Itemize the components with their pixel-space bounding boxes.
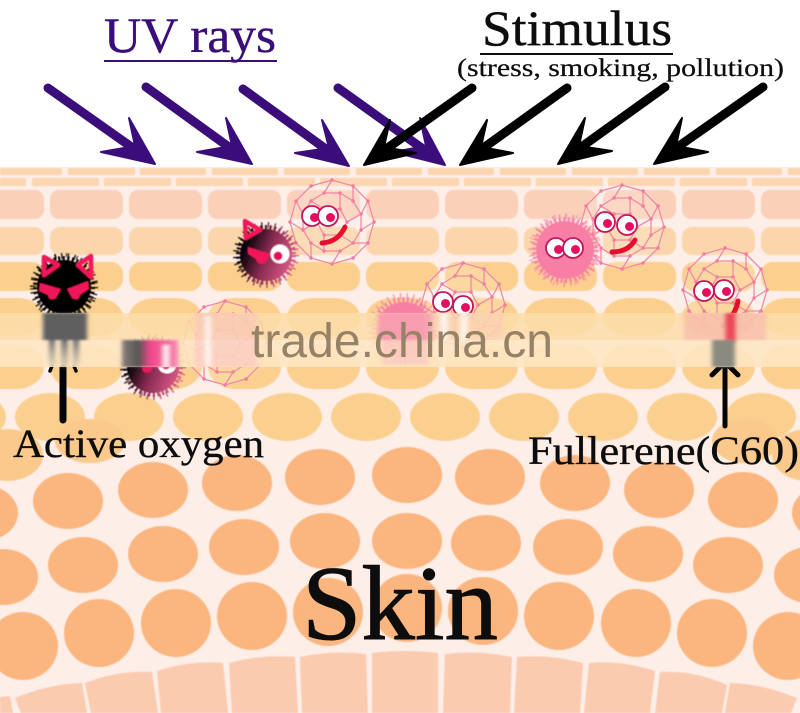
- brick row 3: [0, 190, 800, 219]
- fullerene character top left: [290, 180, 374, 264]
- watermark band: [0, 313, 800, 367]
- label pointer: active oxygen barbs: [50, 366, 76, 371]
- heading: UV rays: UV rays: [104, 7, 276, 63]
- subheading: stimulus sources: (stress, smoking, pollution): [457, 55, 784, 82]
- label: Active oxygen: Active oxygen: [13, 421, 264, 466]
- brick row 4: [0, 227, 800, 255]
- heading: Stimulus: Stimulus: [482, 0, 672, 56]
- round orange cells: [0, 447, 800, 680]
- skin cell layers: [0, 168, 800, 713]
- UV arrow 4: [338, 88, 445, 165]
- thin surface bricks: [0, 168, 800, 186]
- fullerene character top right: [580, 185, 664, 269]
- half-neutralised oxygen character top: [236, 221, 296, 285]
- pink neutralised oxygen character: [530, 215, 600, 285]
- UV arrow 1: [48, 88, 155, 164]
- stimulus arrow 3: [558, 87, 665, 164]
- characters layer: [32, 180, 767, 397]
- half-neutralised oxygen character lower: [123, 337, 183, 397]
- stimulus arrow 4: [654, 87, 763, 164]
- yellow-orange transition cells: [0, 419, 800, 481]
- label pointer: fullerene: [712, 362, 738, 426]
- watermark text: trade.china.cn: [251, 315, 553, 368]
- label pointer: active oxygen: [60, 368, 66, 420]
- UV arrow 2: [146, 87, 252, 164]
- stimulus arrow 1: [364, 88, 472, 165]
- stimulus arrows: [364, 87, 763, 165]
- label: Fullerene (C60): Fullerene(C60): [528, 428, 799, 473]
- UV arrow 3: [243, 89, 349, 166]
- oval cell row: [0, 393, 796, 441]
- UV ray arrows: [48, 87, 445, 166]
- skin background: [0, 167, 800, 713]
- fullerene character far right: [683, 248, 767, 332]
- bottom columnar cells: [0, 651, 797, 713]
- brick rows 5 to 7: [0, 262, 800, 389]
- main label: Skin: Skin: [302, 545, 498, 662]
- fullerene character centre: [421, 263, 505, 347]
- stimulus arrow 2: [460, 88, 567, 165]
- fullerene character lower left: [183, 301, 267, 385]
- black active oxygen character: [32, 255, 96, 319]
- watermark smeared artefacts: [43, 313, 766, 368]
- pink oxygen character centre: [370, 296, 438, 364]
